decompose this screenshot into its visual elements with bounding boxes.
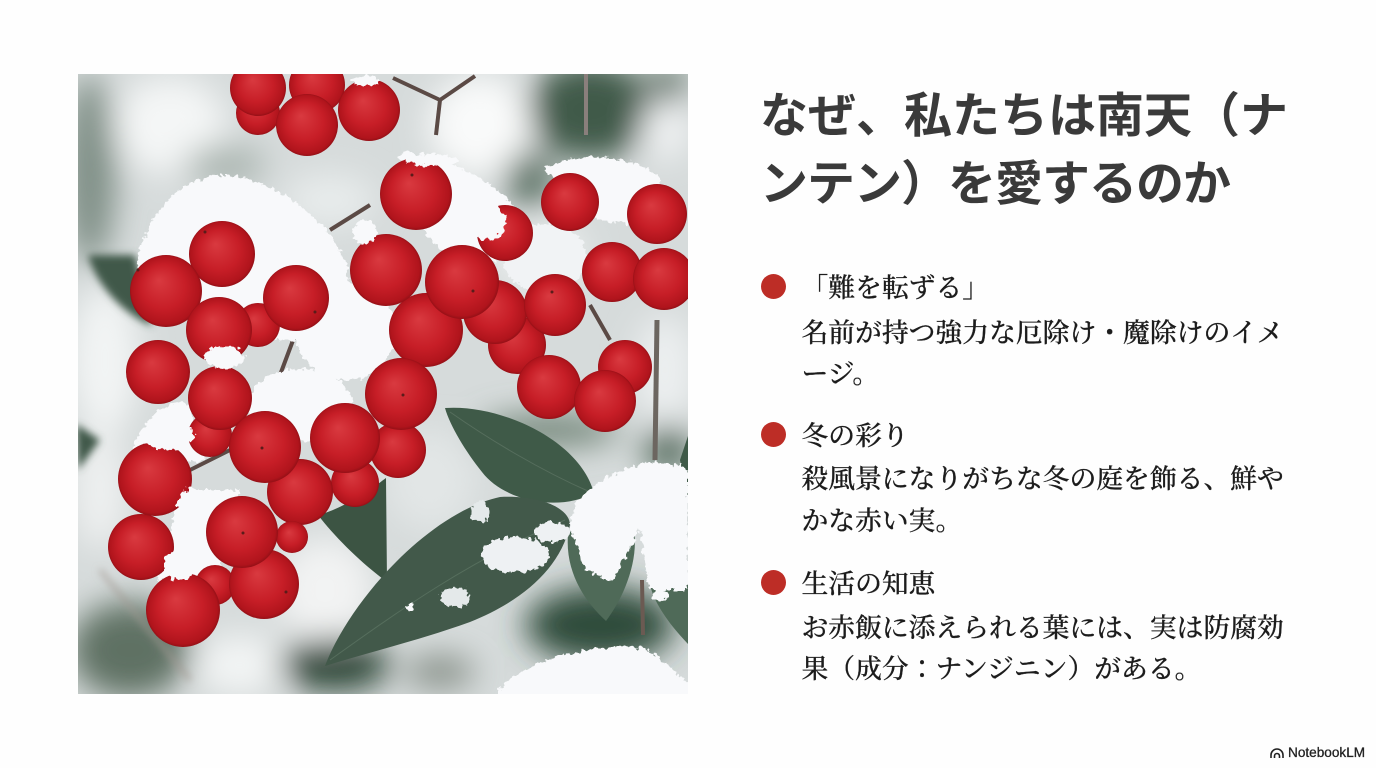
snow: [132, 152, 690, 700]
branches: [100, 74, 657, 680]
snow flecks over berries and leaves: [142, 76, 668, 613]
bullet: 難を転ずる: ージ。: [802, 359, 879, 389]
bullet: 生活の知恵: 果（成分：ナンジニン）がある。: [802, 654, 1201, 684]
bullet: 難を転ずる: 「難を転ずる」: [802, 273, 989, 303]
title: [760, 90, 1288, 211]
logo: NotebookLM: NotebookLM: [1288, 745, 1365, 760]
berry calyx dots: [136, 174, 554, 594]
bullet: 難を転ずる: [761, 273, 1284, 389]
bullet: 冬の彩り: 冬の彩り: [802, 421, 909, 451]
bullet: 冬の彩り: [761, 421, 1284, 536]
bullet: 生活の知恵: お赤飯に添えられる葉には、実は防腐効: [802, 613, 1284, 643]
blurred background: [64, 60, 695, 698]
bullet: 生活の知恵: 生活の知恵: [802, 569, 935, 599]
bullet: 冬の彩り: かな赤い実。: [802, 506, 962, 536]
berries: [108, 57, 695, 647]
bullet: 難を転ずる: 名前が持つ強力な厄除け・魔除けのイメ: [802, 318, 1284, 348]
title: ンテン）を愛するのか: [760, 158, 1230, 211]
leaves: [76, 255, 688, 666]
title: なぜ、私たちは南天（ナ: [760, 90, 1288, 143]
bullet: 生活の知恵: [761, 569, 1284, 684]
bullet: 冬の彩り: 殺風景になりがちな冬の庭を飾る、鮮や: [802, 464, 1284, 494]
photo: snow-covered nandina berries: [78, 74, 688, 694]
